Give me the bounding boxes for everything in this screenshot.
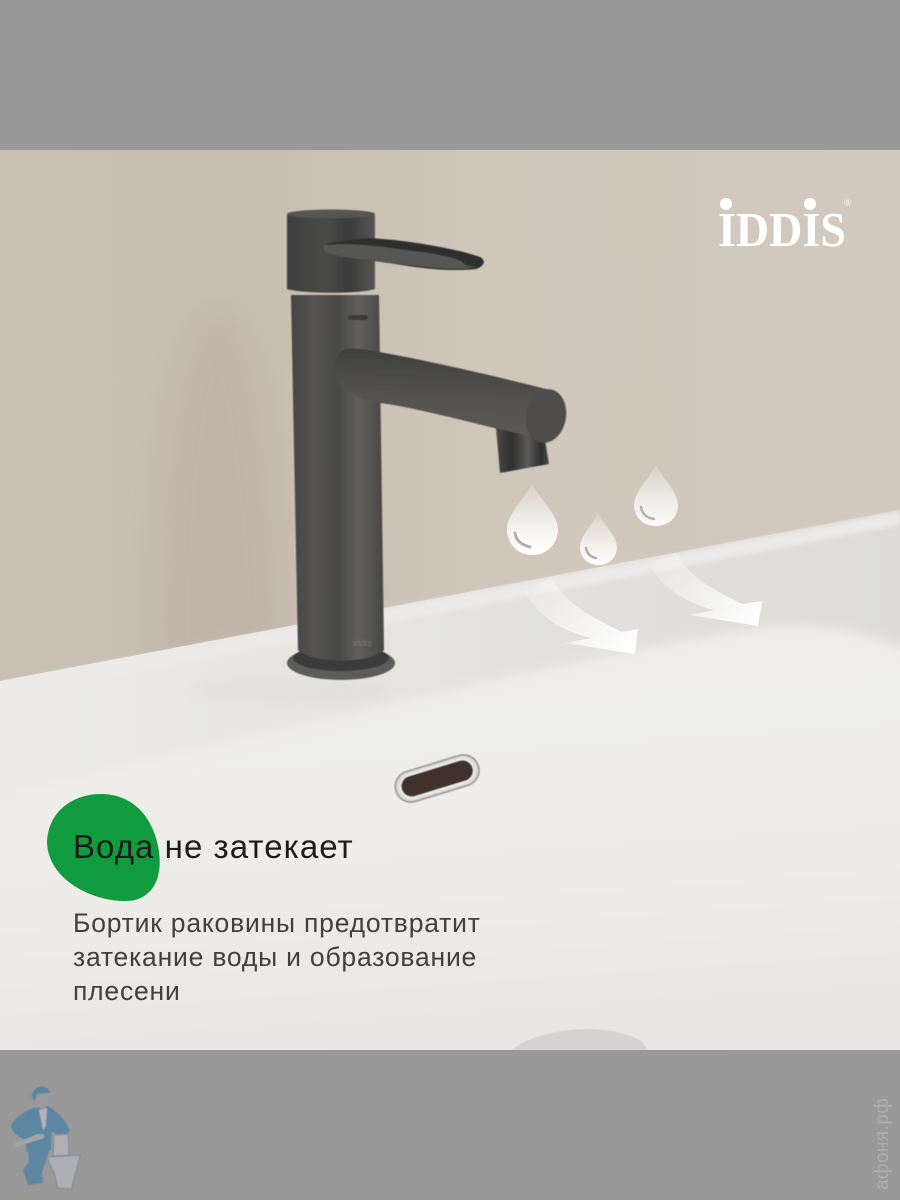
temperature mark: [348, 315, 368, 320]
icon: overflow hole: [391, 751, 483, 806]
drain edge: [512, 1029, 648, 1050]
icon: water drops: [507, 465, 678, 565]
logo: iDDiS: IDDIS: [718, 202, 846, 257]
bottom grey band: [0, 1050, 900, 1200]
arrow: left flow: [525, 577, 638, 654]
small logo on body: iddis: [353, 638, 372, 648]
plumber hair: [32, 1087, 50, 1101]
faucet base plate: [287, 646, 395, 680]
plumber legs: [23, 1148, 50, 1185]
faucet spout: [334, 348, 550, 440]
upper drop: [634, 465, 678, 526]
arrow: right flow: [649, 553, 762, 626]
faucet shadow on wall: [172, 339, 262, 647]
sink rim: [134, 513, 900, 656]
faucet lever: [322, 238, 484, 270]
faucet body: [291, 295, 384, 660]
photo panel: wall and sink: [0, 150, 900, 1100]
watermark: site name: афоня.рф: [872, 1098, 893, 1190]
toilet bowl: [48, 1155, 80, 1189]
spout aerator neck: [496, 428, 549, 473]
sink deck: [0, 510, 900, 808]
description text: [73, 908, 481, 1006]
sink bowl: [290, 626, 900, 1050]
description text: затекание воды и образование: [73, 942, 477, 972]
beige wall: [0, 150, 900, 690]
top grey band: [0, 0, 900, 150]
icon: plumber watermark: [11, 1087, 80, 1189]
description text: Бортик раковины предотвратит: [73, 908, 481, 938]
faucet base shadow: [190, 676, 390, 704]
green blob accent: [47, 794, 160, 901]
description text: плесени: [73, 976, 181, 1006]
plumber jacket: [11, 1106, 70, 1152]
spout end circle: [522, 386, 570, 446]
plumber shirt: [39, 1108, 47, 1130]
heading: Вода не затекает: [73, 828, 354, 865]
plumber face: [34, 1090, 50, 1108]
large drop: [507, 484, 558, 555]
wrench: [13, 1134, 44, 1147]
toilet tank: [53, 1134, 69, 1156]
icon: faucet: [190, 210, 570, 704]
small drop: [580, 513, 617, 565]
faucet cap: [287, 210, 375, 293]
logo: iDDiS: ®: [844, 198, 852, 209]
